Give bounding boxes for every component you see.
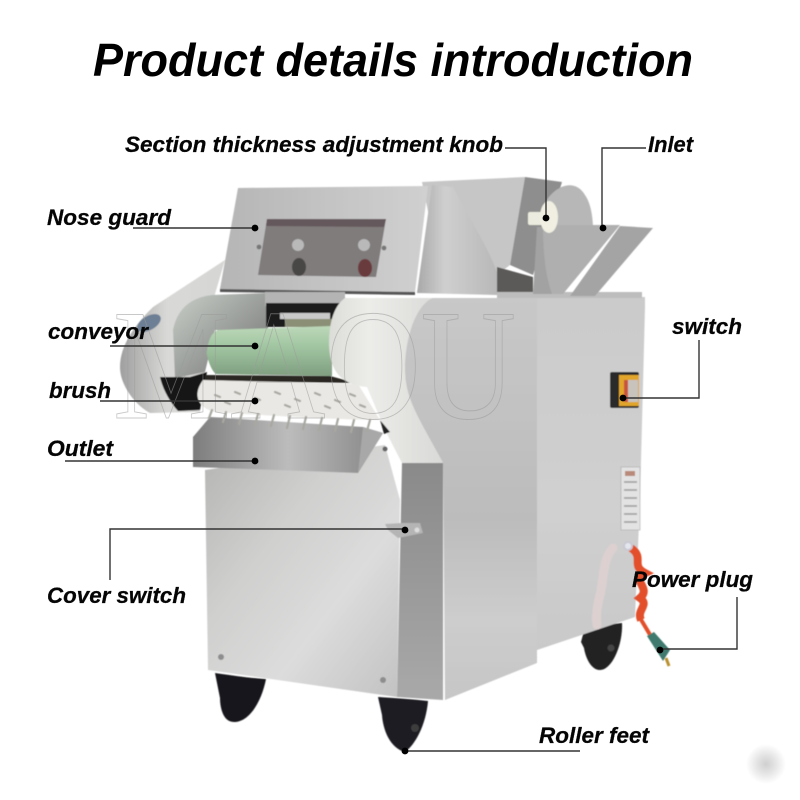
base rail [497,292,642,298]
callout: section thickness adjustment knob: Section thickness adjustment knob [125,132,503,157]
green conveyor roller [206,326,332,376]
adjustment knob [528,201,558,233]
cover inner edge [380,420,390,434]
callout: conveyor: conveyor [48,319,149,344]
nose guard box [220,185,497,295]
callout: power plug [632,567,753,653]
power switch [610,372,639,408]
window [258,219,386,277]
callout: roller feet [402,723,651,754]
callout: power plug: Power plug [632,567,753,592]
callout: conveyor [48,319,258,349]
smudge mark [746,744,786,784]
hood logo [134,310,164,336]
brush roller [197,380,380,432]
belt shadow [205,375,356,383]
watermark MAOU: MAOU [113,278,516,453]
callout: inlet: Inlet [648,132,694,157]
cord reflection [596,548,613,625]
callout: inlet [600,132,694,231]
power cord [624,542,670,666]
inlet hopper [533,225,653,296]
wheels [215,623,622,752]
outlet chute [193,417,383,473]
title: Product details introduction [93,34,693,86]
callout: switch: switch [672,314,742,339]
outlet side screw [382,446,388,452]
cover latch [385,523,423,538]
upper hopper [422,177,562,296]
centre mechanism [265,292,345,327]
main side face [405,298,537,700]
dark corner strip [397,463,443,700]
left hood [120,260,268,413]
callout: nose guard [47,205,258,231]
callout: outlet: Outlet [47,436,115,461]
cutter disc [545,185,593,232]
callout: switch [620,314,742,401]
right curved cover [329,298,443,463]
callout: cover switch [47,527,408,608]
callout: outlet [47,436,258,464]
callout: brush: brush [49,378,111,403]
callout: brush [49,378,258,404]
warning sticker [621,467,640,530]
callout: section thickness adjustment knob [125,132,549,221]
machine illustration [120,177,670,752]
screws [218,654,386,683]
front lower panel [205,445,400,697]
right side panel [500,297,645,650]
callout: roller feet: Roller feet [539,723,651,748]
callout: nose guard: Nose guard [47,205,172,230]
callout: cover switch: Cover switch [47,583,186,608]
